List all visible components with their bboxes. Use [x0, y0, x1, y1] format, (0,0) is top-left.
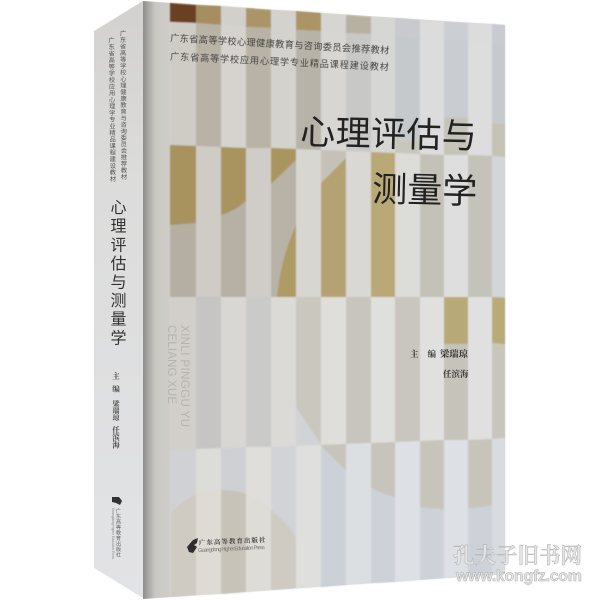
spine series line 1: 广东省高等学校心理健康教育与咨询委员会推荐教材 [118, 29, 127, 180]
book spine [94, 1, 143, 598]
spine series line 2: 广东省高等学校应用心理学专业精品课程建设教材 [107, 36, 116, 182]
watermark [453, 544, 582, 585]
watermark chinese: 孔夫子旧书网 [453, 544, 582, 568]
spine publisher english: Guangdong Higher Education Press [111, 508, 115, 559]
pinyin title line 1: XINLI PINGGU YU [178, 325, 190, 427]
editor name 2: 任滨海 [443, 369, 469, 379]
editor name 1: 梁瑞琼 [440, 348, 469, 360]
spine publisher name: 广东高等教育出版社 [115, 507, 121, 559]
spine title: 心理评估与测量学 [108, 199, 126, 348]
row 0 blocks [170, 3, 505, 43]
row 3 blocks [170, 297, 505, 450]
row 2 blocks [170, 145, 505, 297]
series line 2: 广东省高等学校应用心理学专业精品课程建设教材 [170, 51, 390, 72]
lower left circle shape [171, 490, 296, 597]
spine publisher logo [112, 497, 122, 505]
publisher english name: Guangdong Higher Education Press [198, 545, 265, 554]
book front cover [143, 1, 505, 599]
publisher name: 广东高等教育出版社 [199, 535, 267, 547]
main title line 1: 心理评估与 [300, 113, 478, 156]
publisher logo [187, 538, 198, 553]
editor label: 主编 [410, 349, 445, 359]
spine editor names: 梁瑞琼 [112, 399, 120, 422]
row 1 blocks [170, 22, 505, 157]
cover base [143, 1, 505, 599]
series line 1: 广东省高等学校心理健康教育与咨询委员会推荐教材 [170, 32, 390, 56]
spine editor name 2: 任滨海 [111, 425, 120, 450]
lower right circle shape [321, 439, 492, 509]
watermark url: www.kongfz.com [455, 568, 582, 585]
main title line 2: 测量学 [372, 170, 478, 212]
spine editor label: 主编 [111, 371, 120, 398]
cover colour block pattern [170, 3, 505, 597]
row 4 blocks [170, 438, 505, 597]
spine panel [94, 1, 143, 598]
pinyin title line 2: CELIANG XUE [165, 325, 177, 404]
hinge strip [143, 1, 170, 599]
